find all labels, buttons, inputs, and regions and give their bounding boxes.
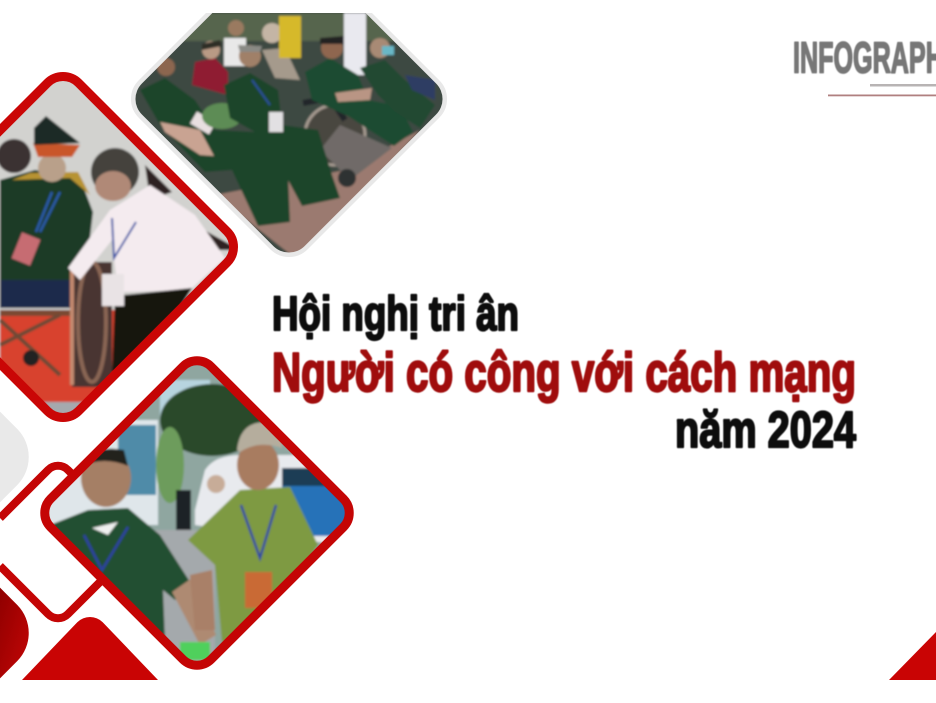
wheelchair xyxy=(305,105,365,165)
title block xyxy=(272,288,856,458)
red triangle bottom right xyxy=(889,632,936,680)
left man xyxy=(50,508,192,640)
white uniform xyxy=(344,13,366,75)
white shirt xyxy=(224,38,246,66)
white van xyxy=(194,454,330,544)
lap and chair xyxy=(0,280,72,308)
man in white shirt xyxy=(68,185,225,292)
header rule red xyxy=(828,94,936,96)
small red outlined diamond xyxy=(0,466,120,618)
green bag xyxy=(180,642,210,660)
dark red rounded diamond xyxy=(0,588,29,678)
attendee red xyxy=(192,58,228,95)
header rule grey xyxy=(870,84,936,86)
decorative diamonds on the left edge xyxy=(0,412,158,680)
beige elder xyxy=(262,48,300,80)
yellow xyxy=(279,16,301,58)
title line 1: Hội nghị tri ân xyxy=(272,288,519,341)
left soldier xyxy=(0,139,31,173)
ground xyxy=(155,530,215,670)
seated veteran 1 xyxy=(140,78,290,226)
seated veteran 3 xyxy=(305,58,413,146)
wheelchair xyxy=(72,262,112,387)
photo: soldier and man in white shirt xyxy=(0,67,243,430)
helmet xyxy=(202,103,242,129)
title line 3: năm 2024 xyxy=(675,401,856,458)
right man xyxy=(188,487,318,642)
grey rounded diamond xyxy=(0,412,29,502)
seated veteran 4 xyxy=(360,60,435,128)
trees xyxy=(160,384,264,456)
red bottom diamond xyxy=(22,617,158,680)
seated veteran 2 xyxy=(224,73,340,206)
photo: two veterans walking xyxy=(40,356,354,670)
photo: veterans seated in wheelchairs xyxy=(126,0,452,262)
